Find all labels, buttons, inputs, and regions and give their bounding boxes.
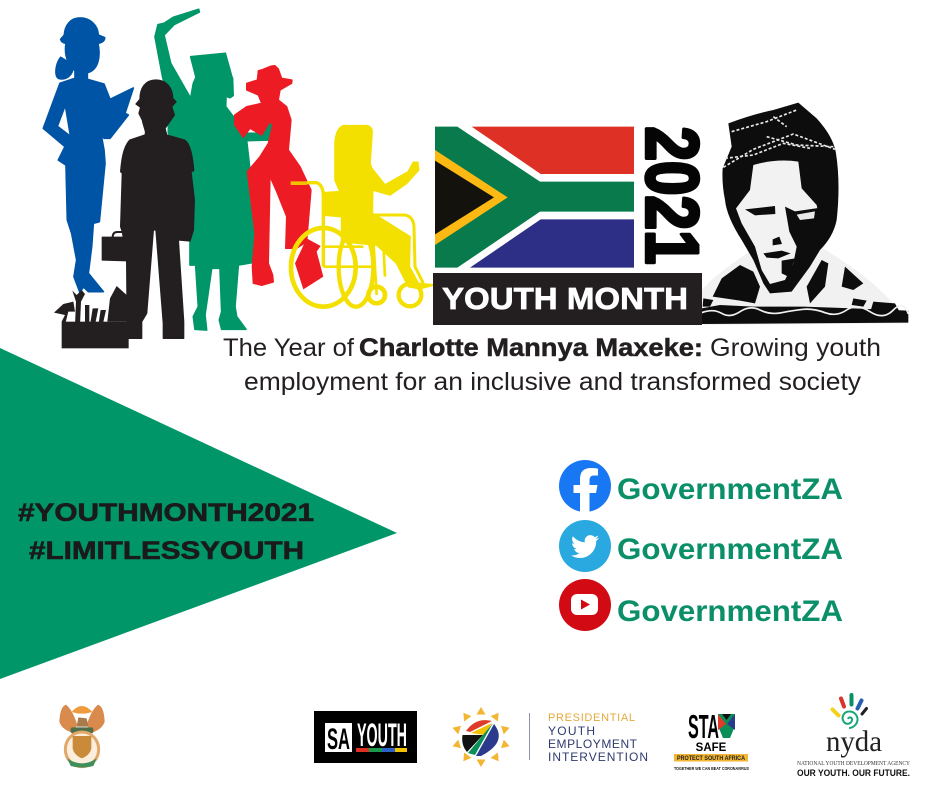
silhouette: green tassel — [227, 77, 234, 99]
divider — [529, 713, 530, 760]
flag: blue stripe — [470, 219, 634, 268]
banner: title text: YOUTH MONTH — [442, 281, 688, 316]
hashtag: YouthMonth2021: #YOUTHMONTH2021 — [18, 499, 314, 527]
silhouette: red folder — [295, 238, 323, 289]
panel: green hashtag triangle — [0, 348, 397, 679]
logo: NYDA — [797, 695, 911, 779]
logo: black tile — [314, 711, 417, 763]
cut-out: gap beside blue figure's arm — [58, 108, 69, 134]
logo: hand fingers — [832, 695, 866, 716]
triangle shape — [0, 348, 397, 679]
label: Intervention: INTERVENTION — [548, 750, 648, 764]
portrait: facial features — [745, 206, 820, 277]
flag: red stripe — [472, 127, 634, 174]
label: Presidential: PRESIDENTIAL — [548, 712, 635, 724]
portrait: wrap highlights — [723, 110, 835, 167]
portrait: dark head and wrap — [722, 103, 839, 293]
label: Youth: YOUTH — [548, 724, 595, 738]
portrait: patterned collar line — [702, 306, 908, 316]
silhouette: blue businesswoman — [43, 18, 133, 293]
flag: South African flag — [435, 127, 634, 268]
theme: subtitle text block — [223, 334, 881, 396]
logo: South African coat of arms — [59, 705, 105, 768]
logo: SA Youth: YOUTH — [357, 717, 407, 753]
portrait: Charlotte Maxeke — [702, 103, 908, 325]
banner: black background — [433, 273, 702, 325]
social: YouTube row — [559, 579, 843, 631]
social: Twitter row — [559, 520, 843, 572]
theme: line 1 lead: The Year of — [223, 334, 354, 362]
icon: Twitter — [559, 520, 611, 572]
portrait: eye highlight — [797, 211, 815, 220]
label: Employment: EMPLOYMENT — [548, 737, 638, 751]
year: vertical 2021: 2021 — [630, 126, 714, 264]
logo: Protect South Africa: PROTECT SOUTH AFRICA — [677, 756, 746, 762]
logo: SA Youth — [314, 711, 417, 763]
logo: colour bar — [356, 748, 407, 752]
flag: black triangle — [435, 161, 494, 234]
icon: YouTube — [559, 579, 611, 631]
handle: YouTube: GovernmentZA — [617, 595, 843, 628]
logo: agency name: NATIONAL YOUTH DEVELOPMENT AGENCY — [797, 761, 911, 767]
hashtag: LimitlessYouth: #LIMITLESSYOUTH — [29, 537, 304, 565]
theme: line 1 tail: Growing youth — [710, 334, 881, 362]
portrait: pale shoulders — [702, 247, 908, 325]
social: Facebook row — [559, 460, 843, 512]
theme: line 1 bold name: Charlotte Mannya Maxeke: — [359, 334, 703, 362]
silhouette: yellow wheelchair user — [291, 126, 434, 307]
logo: flag-coloured Y — [718, 714, 735, 738]
flag: gold triangle — [435, 150, 508, 245]
logo: slogan: OUR YOUTH. OUR FUTURE. — [797, 768, 910, 779]
portrait: dark clothing patches — [702, 260, 908, 324]
handle: Twitter: GovernmentZA — [617, 533, 843, 566]
illustration: silhouettes of young workers — [43, 9, 434, 348]
handle: Facebook: GovernmentZA — [617, 473, 843, 506]
logo: SA letters: SA — [327, 723, 350, 756]
logo: SA box — [325, 723, 352, 752]
icon: tool case handle — [113, 232, 125, 237]
logo: Stay Safe: STA — [688, 708, 719, 745]
icon: Facebook — [559, 460, 611, 512]
logo: yellow band — [674, 754, 748, 762]
logo: sun emblem — [451, 707, 511, 767]
silhouette: black worker with tool case — [102, 80, 194, 338]
logo: Stay Safe — [674, 708, 749, 771]
silhouette: red farmer — [235, 66, 311, 285]
logo: nyda wordmark: nyda — [826, 725, 882, 758]
theme: line 2: employment for an inclusive and transformed society — [244, 368, 862, 396]
logo: SAFE: SAFE — [696, 742, 727, 754]
silhouette: green graduate — [155, 9, 272, 330]
logo: green spiral — [843, 711, 858, 728]
portrait: lit face — [736, 161, 819, 284]
banner: Youth Month — [433, 273, 702, 325]
logo: tagline: TOGETHER WE CAN BEAT CORONAVIRUS — [674, 766, 749, 771]
logo: Presidential Youth Employment Intervention — [451, 707, 648, 767]
icon: toolbox with tools — [54, 286, 129, 348]
flag: green Y band — [435, 127, 634, 268]
